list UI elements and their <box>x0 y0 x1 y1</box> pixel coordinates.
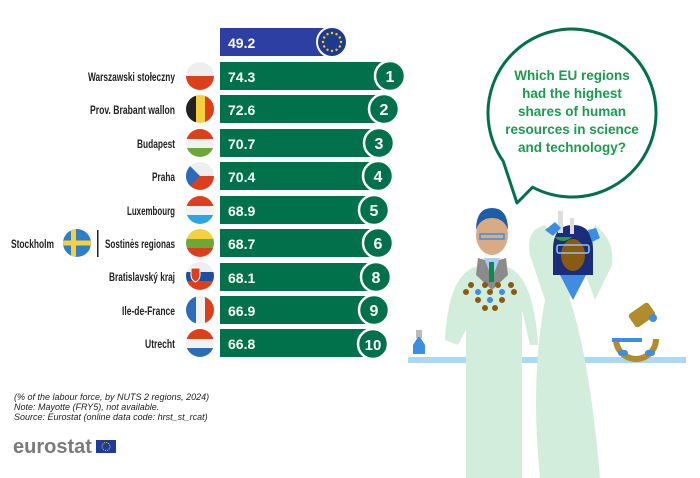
EU average bar: 49.2 <box>228 35 255 51</box>
man <box>445 208 538 478</box>
row 3: 3 <box>375 136 384 153</box>
speech bubble: shares of human <box>518 104 626 119</box>
row 5: Luxembourg <box>127 206 175 218</box>
footnotes: (% of the labour force, by NUTS 2 regions, 2024) <box>14 392 209 402</box>
row 8: Bratislavský kraj <box>109 272 175 284</box>
row 1 <box>88 61 405 91</box>
row 6: 6 <box>374 236 383 253</box>
row 6: 68.7 <box>228 236 255 252</box>
row 3: Budapest <box>137 139 175 151</box>
row 4: Praha <box>152 172 175 184</box>
row 4 <box>152 161 393 191</box>
row 1: 74.3 <box>228 69 255 85</box>
row 10: 66.8 <box>228 336 255 352</box>
row 5 <box>127 195 389 225</box>
row 2: 72.6 <box>228 102 255 118</box>
row 9 <box>122 295 389 325</box>
row 6 <box>11 228 393 258</box>
row 6: Stockholm <box>11 239 54 251</box>
speech bubble: Which EU regions <box>514 68 630 83</box>
footnotes <box>14 392 209 422</box>
row 3: 70.7 <box>228 136 255 152</box>
row 1: 1 <box>386 69 395 86</box>
speech bubble: had the highest <box>522 86 622 101</box>
flask <box>413 330 425 354</box>
row 6: Sostinės regionas <box>105 239 175 251</box>
row 8: 68.1 <box>228 270 255 286</box>
row 9: Ile-de-France <box>122 306 175 318</box>
row 2 <box>90 94 399 124</box>
EU average bar <box>220 27 347 57</box>
row 2: Prov. Brabant wallon <box>90 105 175 117</box>
row 2: 2 <box>380 102 389 119</box>
bar chart: regions <box>11 61 405 359</box>
speech bubble <box>488 29 656 203</box>
illustration: scientists <box>408 208 686 478</box>
row 5: 68.9 <box>228 203 255 219</box>
row 8: 8 <box>372 270 381 287</box>
footnotes: Note: Mayotte (FRY5), not available. <box>14 402 159 412</box>
footnotes: Source: Eurostat (online data code: hrst_st_rcat) <box>14 412 208 422</box>
row 10: Utrecht <box>145 339 175 351</box>
row 10 <box>145 329 388 359</box>
woman <box>529 211 612 478</box>
speech bubble: and technology? <box>518 140 626 155</box>
row 1: Warszawski stołeczny <box>88 72 175 84</box>
row 3 <box>137 128 394 158</box>
row 4: 4 <box>374 169 383 186</box>
speech bubble: resources in science <box>505 122 639 137</box>
eurostat logo: eurostat <box>13 436 92 458</box>
row 9: 66.9 <box>228 303 255 319</box>
row 9: 9 <box>370 303 379 320</box>
row 5: 5 <box>370 203 379 220</box>
row 8 <box>109 262 391 292</box>
microscope <box>612 302 657 359</box>
row 4: 70.4 <box>228 169 255 185</box>
row 10: 10 <box>365 337 381 354</box>
